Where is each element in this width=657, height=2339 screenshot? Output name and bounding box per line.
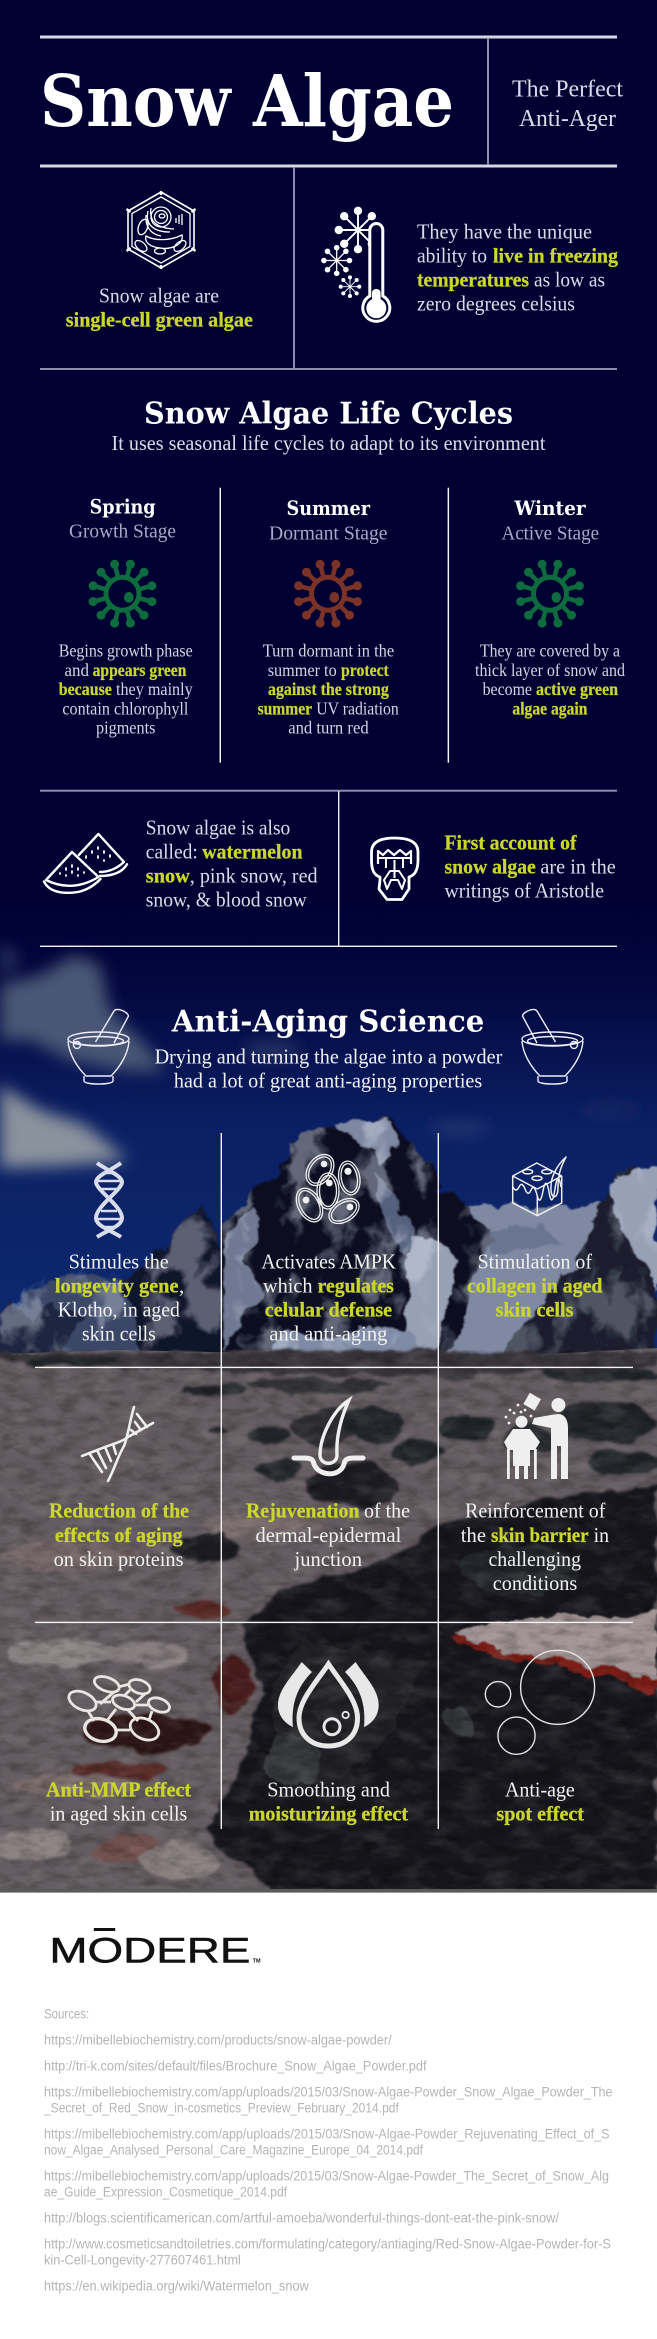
text: reduction: Reduction of the bbox=[49, 1499, 189, 1523]
icon: red algae cell bbox=[299, 564, 357, 623]
navy panel background bbox=[0, 0, 657, 1000]
text: first account: are in the bbox=[540, 854, 616, 878]
spring text: and bbox=[64, 660, 89, 680]
ground bbox=[0, 1348, 657, 1893]
icon: green algae cell, active bbox=[521, 564, 579, 623]
winter text: They are covered by a bbox=[480, 641, 620, 661]
panel: also called watermelon snow bbox=[40, 790, 617, 947]
heading: anti-aging science: had a lot of great anti-aging properties bbox=[174, 1068, 482, 1092]
text: collagen bbox=[467, 1249, 603, 1321]
text: rejuvenation: junction bbox=[294, 1547, 362, 1571]
text: freezing temperatures: as low as bbox=[534, 267, 605, 291]
text: rejuvenation bbox=[246, 1499, 410, 1571]
cell: spot effect bbox=[485, 1650, 595, 1826]
summer text: against the strong bbox=[268, 679, 389, 699]
heading: life cycles bbox=[112, 396, 546, 455]
boulders bbox=[267, 1545, 657, 1790]
text: anti-MMP: in aged skin cells bbox=[50, 1802, 187, 1826]
text: single-cell green algae: Snow algae are bbox=[99, 284, 219, 308]
cell: anti-MMP bbox=[46, 1673, 191, 1826]
summer text bbox=[258, 641, 399, 737]
cell: skin barrier bbox=[461, 1393, 609, 1595]
winter text: algae again bbox=[512, 698, 588, 718]
text: anti-MMP: Anti-MMP effect bbox=[46, 1778, 191, 1802]
summer text: UV radiation bbox=[316, 698, 399, 718]
summer heading: Dormant Stage bbox=[269, 523, 388, 544]
text: reduction: effects of aging bbox=[55, 1523, 183, 1547]
grey strip under photo bbox=[0, 1889, 657, 1893]
text: AMPK: Activates AMPK bbox=[261, 1249, 396, 1273]
winter text: active green bbox=[536, 679, 618, 699]
icon: water drops bbox=[278, 1662, 379, 1746]
text: skin barrier: challenging bbox=[488, 1547, 581, 1571]
winter heading bbox=[502, 496, 599, 544]
sources list: http://www.cosmeticsandtoiletries.com/formulating/category/antiaging/Red-Snow-Algae-Powder-for-S bbox=[44, 2236, 611, 2251]
text: watermelon snow: snow, & blood snow bbox=[146, 887, 308, 911]
summer text: Turn dormant in the bbox=[263, 641, 394, 661]
spring heading: Spring bbox=[90, 494, 156, 518]
text: AMPK: regulates bbox=[318, 1273, 394, 1297]
text: AMPK: celular defense bbox=[265, 1297, 392, 1321]
summer text: protect bbox=[341, 660, 389, 680]
heading: anti-aging science: Anti-Aging Science bbox=[171, 1005, 484, 1040]
icon: snowflakes and thermometer bbox=[321, 207, 390, 321]
spring text: pigments bbox=[96, 717, 156, 737]
text: skin barrier bbox=[461, 1499, 609, 1595]
text: freezing temperatures: zero degrees celsius bbox=[417, 291, 575, 315]
text: collagen: skin cells bbox=[496, 1297, 574, 1321]
icon: mortar and pestle left bbox=[68, 1010, 129, 1084]
tagline: The Perfect bbox=[512, 76, 623, 102]
summer heading: Summer bbox=[286, 496, 370, 520]
heading: life cycles: It uses seasonal life cycles to adapt to its environment bbox=[112, 431, 546, 455]
sources list: kin-Cell-Longevity-277607461.html bbox=[44, 2252, 241, 2267]
summer text: summer to bbox=[268, 660, 337, 680]
winter text: thick layer of snow and bbox=[475, 660, 625, 680]
logo: Modere: MODERE bbox=[49, 1932, 250, 1971]
icon: cells bbox=[291, 1149, 364, 1229]
text: first account bbox=[444, 830, 616, 903]
text: moisturizing: Smoothing and bbox=[267, 1778, 390, 1802]
text: moisturizing: moisturizing effect bbox=[249, 1802, 408, 1826]
cell: moisturizing bbox=[249, 1662, 408, 1826]
sources list: https://mibellebiochemistry.com/app/uploads/2015/03/Snow-Algae-Powder_The_Secret_of_Snow_Alg bbox=[44, 2168, 609, 2183]
icon: spot circles bbox=[485, 1650, 595, 1754]
tagline bbox=[512, 76, 623, 132]
panel: spring bbox=[59, 494, 193, 737]
cell: rejuvenation bbox=[246, 1400, 410, 1571]
winter heading: Active Stage bbox=[502, 523, 599, 544]
summer text: summer bbox=[258, 698, 312, 718]
icon: Aristotle head bbox=[372, 838, 418, 900]
spring text bbox=[59, 641, 193, 737]
text: watermelon snow: called: bbox=[146, 839, 198, 863]
summer heading bbox=[269, 496, 388, 544]
text: collagen: collagen in aged bbox=[467, 1273, 603, 1297]
text: freezing temperatures bbox=[417, 219, 618, 315]
text: moisturizing bbox=[249, 1778, 408, 1826]
text: single-cell green algae bbox=[66, 284, 253, 332]
text: freezing temperatures: ability to bbox=[417, 243, 487, 267]
winter heading: Winter bbox=[514, 496, 586, 520]
snowy slopes and mountains bbox=[0, 1115, 657, 1365]
text: longevity gene: , bbox=[179, 1273, 184, 1297]
sources list: https://mibellebiochemistry.com/products/snow-algae-powder/ bbox=[44, 2032, 392, 2047]
text: watermelon snow: Snow algae is also bbox=[146, 815, 290, 839]
summer text: and turn red bbox=[288, 717, 369, 737]
text: single-cell green algae: single-cell green algae bbox=[66, 308, 253, 332]
spring text: Begins growth phase bbox=[59, 641, 193, 661]
sources list: Sources: bbox=[44, 2006, 89, 2021]
cell: reduction of aging effects bbox=[49, 1407, 189, 1571]
text: reduction bbox=[49, 1499, 189, 1571]
logo: Modere: TM bbox=[253, 1959, 261, 1965]
text: freezing temperatures: live in freezing bbox=[493, 243, 618, 267]
text: reduction: on skin proteins bbox=[54, 1547, 183, 1571]
spring text: they mainly bbox=[116, 679, 193, 699]
text: rejuvenation: dermal-epidermal bbox=[256, 1523, 401, 1547]
text: anti-MMP bbox=[46, 1778, 191, 1826]
text: watermelon snow bbox=[146, 815, 318, 911]
text: longevity gene bbox=[55, 1249, 184, 1346]
icon: plant cell bbox=[126, 191, 196, 269]
icon: DNA helix bbox=[96, 1163, 122, 1237]
spring text: contain chlorophyll bbox=[62, 698, 189, 718]
mottled snow and red algae bbox=[0, 1510, 320, 1880]
icon: watermelon slices bbox=[44, 834, 127, 893]
text: AMPK: which bbox=[263, 1273, 313, 1297]
text: longevity gene: Stimules the bbox=[69, 1249, 169, 1273]
text: spot effect: Anti-age bbox=[505, 1778, 575, 1802]
header panel bbox=[40, 36, 623, 168]
heading: anti-aging science: Drying and turning the algae into a powder bbox=[155, 1044, 502, 1068]
cell: longevity gene bbox=[55, 1163, 184, 1346]
logo: Modere bbox=[49, 1928, 261, 1971]
text: longevity gene: longevity gene bbox=[55, 1273, 178, 1297]
text: spot effect: spot effect bbox=[496, 1802, 584, 1826]
anti-aging grid lines bbox=[35, 1133, 633, 1829]
text: rejuvenation: of the bbox=[364, 1499, 410, 1523]
sources list: https://mibellebiochemistry.com/app/uploads/2015/03/Snow-Algae-Powder_Snow_Algae_Powder_The bbox=[44, 2084, 612, 2099]
icon: DNA ladder bbox=[82, 1407, 153, 1481]
sources list: _Secret_of_Red_Snow_in-cosmetics_Preview_February_2014.pdf bbox=[43, 2100, 399, 2115]
sources list: http://tri-k.com/sites/default/files/Brochure_Snow_Algae_Powder.pdf bbox=[44, 2058, 427, 2073]
panel: summer bbox=[220, 488, 449, 763]
spring text: appears green bbox=[93, 660, 187, 680]
icon: people pouring water bbox=[504, 1393, 568, 1479]
text: watermelon snow: , pink snow, red bbox=[190, 863, 318, 887]
winter text: become bbox=[483, 679, 532, 699]
spring heading: Growth Stage bbox=[69, 522, 176, 543]
background photo: mountain and red snow bbox=[0, 936, 657, 1893]
panel: freezing temperatures fact bbox=[321, 207, 618, 321]
text: watermelon snow: watermelon bbox=[202, 839, 303, 863]
icon: mortar and pestle right bbox=[522, 1010, 583, 1084]
sources list: http://blogs.scientificamerican.com/artful-amoeba/wonderful-things-dont-eat-the-pink-snow/ bbox=[44, 2210, 559, 2225]
text: spot effect bbox=[496, 1778, 584, 1826]
icon: green algae cell bbox=[93, 564, 152, 623]
sources list bbox=[43, 2006, 613, 2293]
sources list: https://mibellebiochemistry.com/app/uploads/2015/03/Snow-Algae-Powder_Rejuvenating_Effect_of_S bbox=[44, 2126, 610, 2141]
icon: molecular network bbox=[66, 1673, 172, 1745]
sources list: ae_Guide_Expression_Cosmetique_2014.pdf bbox=[44, 2184, 287, 2199]
text: first account: snow algae bbox=[444, 854, 536, 878]
cell: collagen bbox=[467, 1157, 603, 1321]
sources list: https://en.wikipedia.org/wiki/Watermelon_snow bbox=[44, 2278, 309, 2293]
text: AMPK: and anti-aging bbox=[269, 1322, 388, 1346]
title: Snow Algae bbox=[40, 59, 454, 143]
text: first account: First account of bbox=[444, 830, 577, 854]
panel: winter bbox=[475, 496, 625, 718]
tagline: Anti-Ager bbox=[519, 106, 616, 132]
cell: AMPK bbox=[261, 1149, 396, 1346]
text: rejuvenation: Rejuvenation bbox=[246, 1499, 360, 1523]
text: skin barrier: conditions bbox=[493, 1571, 577, 1595]
spring heading bbox=[69, 494, 176, 543]
icon: skin cube bbox=[513, 1157, 566, 1216]
text: skin barrier: Reinforcement of bbox=[465, 1499, 605, 1523]
text: skin barrier: skin barrier bbox=[491, 1523, 589, 1547]
panel: Aristotle fact bbox=[372, 830, 616, 903]
text: longevity gene: skin cells bbox=[82, 1322, 156, 1346]
heading: anti-aging science bbox=[155, 1005, 502, 1092]
sources list: now_Algae_Analysed_Personal_Care_Magazine_Europe_04_2014.pdf bbox=[44, 2142, 423, 2157]
text: AMPK bbox=[261, 1249, 396, 1346]
text: first account: writings of Aristotle bbox=[444, 879, 604, 903]
text: longevity gene: Klotho, in aged bbox=[58, 1297, 180, 1321]
text: watermelon snow: snow bbox=[146, 863, 191, 887]
text: collagen: Stimulation of bbox=[478, 1249, 592, 1273]
icon: hair follicle bbox=[294, 1400, 363, 1474]
spring text: because bbox=[59, 679, 112, 699]
text: skin barrier: the bbox=[461, 1523, 486, 1547]
heading: life cycles: Snow Algae Life Cycles bbox=[144, 396, 513, 431]
text: freezing temperatures: temperatures bbox=[417, 267, 529, 291]
winter text bbox=[475, 641, 625, 718]
panel: single-cell fact bbox=[40, 167, 617, 370]
text: skin barrier: in bbox=[594, 1523, 609, 1547]
text: freezing temperatures: They have the unique bbox=[417, 219, 592, 243]
